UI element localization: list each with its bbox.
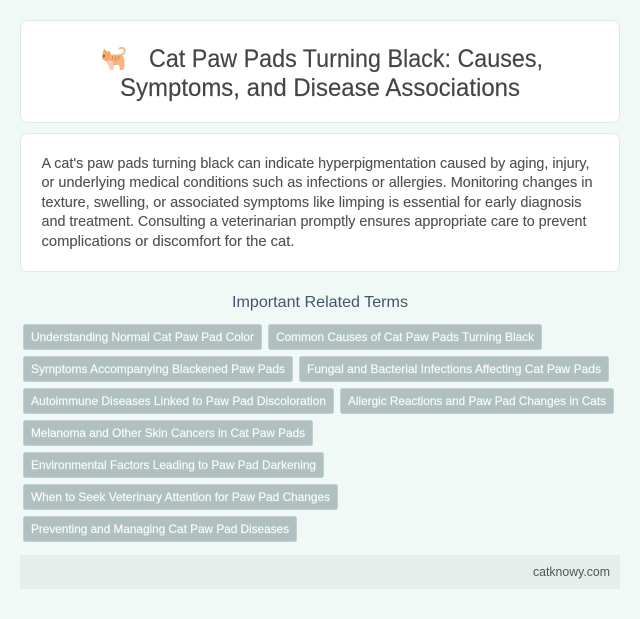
summary text: complications or discomfort for the cat. — [42, 234, 294, 250]
footer text: source: catknowy.com — [533, 565, 610, 579]
icon: cat — [102, 48, 125, 70]
tag: Common Causes of Cat Paw Pads Turning Black — [276, 330, 535, 344]
title text: Cat Paw Pads Turning Black: Causes, — [149, 45, 543, 73]
tag — [24, 484, 338, 510]
panel: summary card — [20, 134, 620, 272]
tag: Allergic Reactions and Paw Pad Changes in Cats — [348, 394, 606, 408]
tag: Fungal and Bacterial Infections Affecting Cat Paw Pads — [307, 362, 601, 376]
heading: important related terms: Important Related Terms — [232, 294, 408, 311]
title text: Symptoms, and Disease Associations — [120, 74, 520, 102]
tag: When to Seek Veterinary Attention for Paw Pad Changes — [31, 490, 330, 504]
tag: Melanoma and Other Skin Cancers in Cat Paw Pads — [31, 426, 305, 440]
tag: Autoimmune Diseases Linked to Paw Pad Discoloration — [31, 394, 326, 408]
summary text: and treatment. Consulting a veterinarian promptly ensures appropriate care to prevent — [42, 214, 586, 230]
panel: title card — [20, 20, 620, 122]
summary text: or underlying medical conditions such as infections or allergies. Monitoring changes in — [42, 175, 592, 191]
summary text — [42, 156, 592, 250]
footer bar — [20, 555, 620, 589]
tag: Preventing and Managing Cat Paw Pad Diseases — [31, 522, 289, 536]
tag — [24, 420, 312, 446]
tag — [24, 452, 324, 478]
tag: Symptoms Accompanying Blackened Paw Pads — [31, 362, 285, 376]
summary text: A cat's paw pads turning black can indicate hyperpigmentation caused by aging, injury, — [42, 156, 590, 172]
tag — [340, 388, 614, 414]
tag — [268, 324, 542, 350]
tag — [24, 324, 262, 350]
panel: related term tags — [24, 324, 614, 542]
tag — [24, 388, 334, 414]
tag: Environmental Factors Leading to Paw Pad Darkening — [31, 458, 316, 472]
tag — [300, 356, 608, 382]
summary text: texture, swelling, or associated symptoms like limping is essential for early diagnosis — [42, 195, 582, 211]
tag — [24, 356, 292, 382]
title text — [120, 45, 543, 102]
tag: Understanding Normal Cat Paw Pad Color — [31, 330, 254, 344]
tag — [24, 516, 296, 542]
